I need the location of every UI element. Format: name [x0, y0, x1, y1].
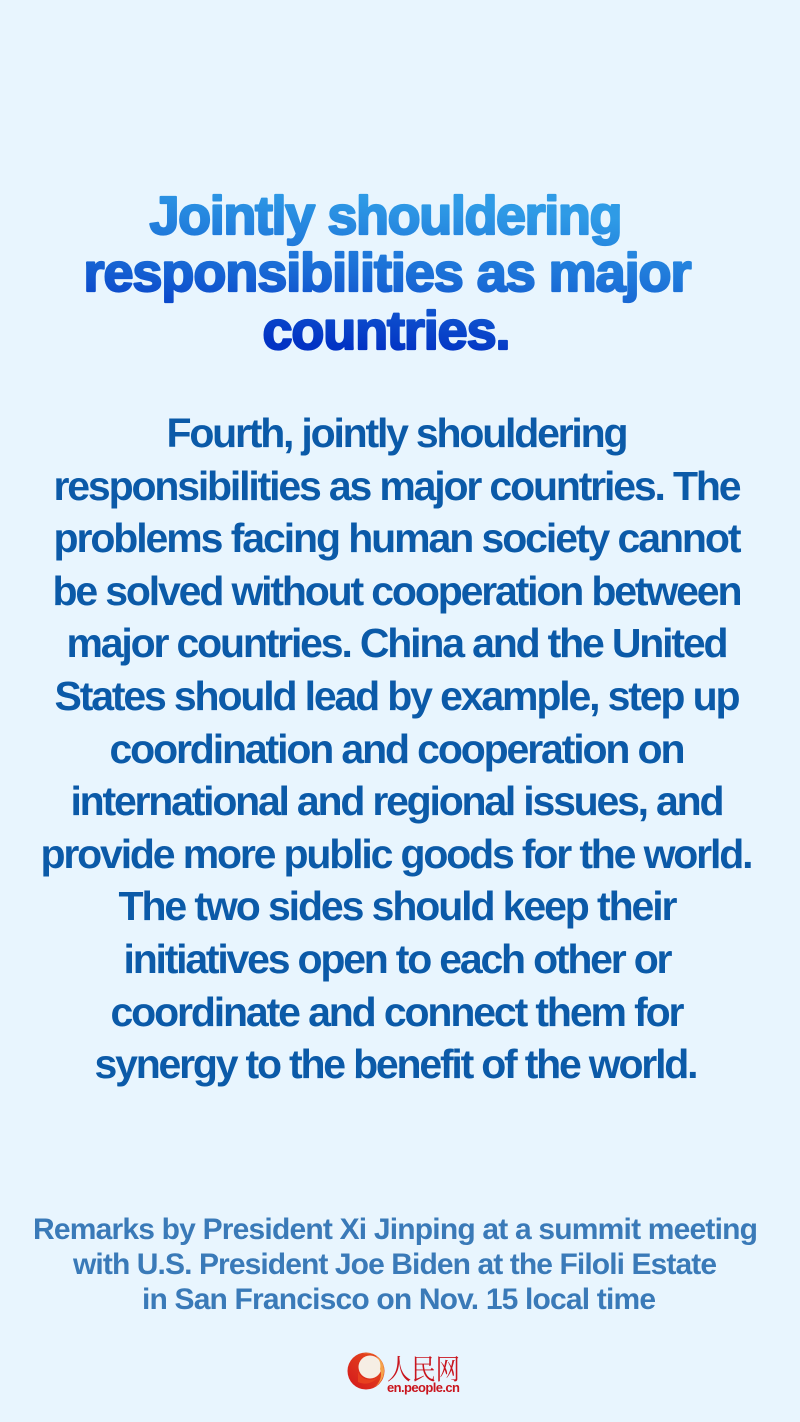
- source attribution: Remarks by President Xi Jinping at a summit meeting: [33, 1213, 758, 1246]
- logo wordmark: 人民网: [387, 1348, 460, 1388]
- body text: be solved without cooperation between: [52, 568, 742, 614]
- body text: responsibilities as major countries. The: [54, 463, 742, 509]
- title: countries.: [262, 301, 510, 361]
- logo: en.people.cn: [348, 1348, 460, 1395]
- source attribution: [33, 1213, 758, 1316]
- title: [84, 186, 692, 361]
- source attribution: in San Francisco on Nov. 15 local time: [142, 1283, 656, 1316]
- body text: problems facing human society cannot: [54, 515, 742, 561]
- icon: red and orange swirl: [348, 1352, 384, 1390]
- body text: States should lead by example, step up: [54, 673, 740, 719]
- body text: coordination and cooperation on: [110, 726, 686, 772]
- body text: initiatives open to each other or: [124, 936, 673, 982]
- body text: provide more public goods for the world.: [40, 831, 754, 877]
- body text: The two sides should keep their: [118, 883, 678, 929]
- title: Jointly shouldering: [150, 186, 622, 246]
- source attribution: with U.S. President Joe Biden at the Filoli Estate: [72, 1248, 717, 1281]
- body text: international and regional issues, and: [70, 778, 724, 824]
- logo url: en.people.cn: [387, 1380, 460, 1395]
- body text: major countries. China and the United: [66, 620, 728, 666]
- body text: Fourth, jointly shouldering: [166, 410, 628, 456]
- body text: coordinate and connect them for: [110, 989, 685, 1035]
- body text: [40, 410, 754, 1087]
- body text: synergy to the benefit of the world.: [94, 1041, 698, 1087]
- title: responsibilities as major: [84, 243, 692, 303]
